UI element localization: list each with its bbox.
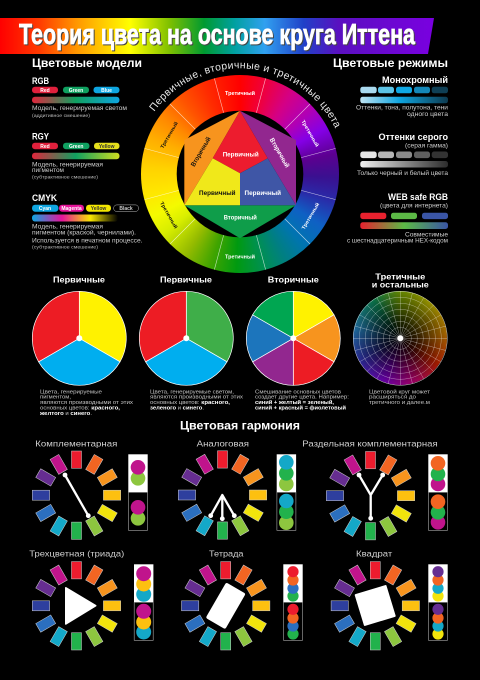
panel: tertiary wheel <box>353 272 447 406</box>
panel: colour modes <box>333 58 449 244</box>
web safe mode: с шестнадцатеричным HEX-кодом <box>347 238 448 244</box>
RGY model: Модель, генерируемая <box>32 163 103 169</box>
web safe mode <box>347 192 449 244</box>
panel: tertiary wheel: и остальные <box>372 280 429 290</box>
CMYK model <box>32 193 143 250</box>
heading: colour modes: Цветовые режимы <box>333 58 448 70</box>
panel: primary light pie: являются производными от этих <box>150 395 243 401</box>
RGB model: Модель, генерируемая светом <box>32 106 127 112</box>
RGY model: Yellow <box>99 144 115 150</box>
monochrome mode: Оттенки, тона, полутона, тени <box>356 106 448 112</box>
web safe mode: WEB safe RGB <box>388 192 448 202</box>
RGY model: Red <box>40 144 50 150</box>
panel: square harmony: Квадрат <box>356 549 392 559</box>
RGB model: (аддитивное смешение) <box>32 113 91 118</box>
wheel labels: Вторичный <box>224 213 257 221</box>
panel: secondary pie: синий + красный = фиолетовый <box>255 404 346 411</box>
RGB model: Blue <box>101 88 112 94</box>
panel: primary light pie: зеленого и синего . <box>150 405 204 411</box>
RGY model: RGY <box>32 132 49 142</box>
curved heading: Первичные, вторичные и третичные цвета <box>149 62 340 128</box>
CMYK model: Magenta <box>61 206 82 212</box>
panel: secondary pie: создает другие цвета. Например: <box>255 395 349 401</box>
panel: primary pigment pie: пигментом, <box>40 395 71 401</box>
panel: split complementary harmony <box>302 439 448 540</box>
greyscale mode: Только черный и белый цвета <box>357 170 449 177</box>
wheel labels: Первичный <box>245 189 281 197</box>
panel: primary light pie: основных цветов: красного, <box>150 400 231 406</box>
monochrome mode <box>356 75 449 118</box>
outer twelve-part ring <box>141 75 339 273</box>
web safe mode: Совместимые <box>405 233 449 239</box>
panel: complementary harmony <box>32 439 148 539</box>
RGY model: пигментом <box>32 168 64 174</box>
wheel labels: Первичный <box>199 189 236 197</box>
panel: primary pigment pie: основных цветов: красного, <box>40 405 121 411</box>
panel: tetrad harmony: Тетрада <box>209 549 244 559</box>
panel: tetrad harmony <box>182 549 303 650</box>
panel: primary pigment pie <box>32 274 133 417</box>
heading: colour models: Цветовые модели <box>32 58 142 70</box>
CMYK model: Cyan <box>39 206 51 212</box>
heading: colour harmony: Цветовая гармония <box>180 418 300 432</box>
RGB model: RGB <box>32 76 49 86</box>
inner hexagon and triangle <box>184 111 296 238</box>
RGY model: Green <box>69 144 83 150</box>
CMYK model: Модель, генерируемая <box>32 224 103 230</box>
RGB model: Green <box>69 88 83 94</box>
greyscale mode: (серая гамма) <box>405 143 448 149</box>
RGB model <box>32 76 127 118</box>
wheel labels: Вторичный <box>189 136 213 168</box>
web safe mode: (цвета для интернета) <box>380 203 448 209</box>
panel: primary light pie: Цвета, генерируемые светом, <box>150 389 234 395</box>
greyscale mode <box>357 132 449 177</box>
wheel labels: Вторичный <box>268 137 291 169</box>
CMYK model: Используется в печатном процессе. <box>32 238 143 244</box>
panel: primary pigment pie: Цвета, генерируемые <box>40 389 102 395</box>
wheel labels <box>158 90 321 260</box>
CMYK model: CMYK <box>32 193 57 203</box>
panel: primary pigment pie: желтого и синего . <box>39 411 92 417</box>
panel: tertiary wheel: Третичные <box>375 272 426 282</box>
panel: tertiary wheel: третичного и далее.м <box>369 400 430 406</box>
greyscale mode: Оттенки серого <box>378 132 448 142</box>
RGY model <box>32 132 120 180</box>
wheel labels: Третичный <box>158 200 179 230</box>
panel: split complementary harmony: Раздельная комплементарная <box>302 439 438 449</box>
CMYK model: Yellow <box>91 206 106 212</box>
CMYK model: Black <box>119 206 133 212</box>
panel: primary pigment pie: Первичные <box>53 274 105 284</box>
CMYK model: (субтрактивное смешение) <box>32 244 99 250</box>
CMYK model: пигментом (краской, чернилами). <box>32 230 136 236</box>
RGY model: (субтрактивное смешение) <box>32 175 99 180</box>
panel: square harmony <box>331 549 448 650</box>
panel: tertiary wheel: Цветовой круг может <box>369 388 431 395</box>
panel: secondary pie: Смешивание основных цветов <box>255 389 341 395</box>
panel: secondary pie: Вторичные <box>268 274 319 284</box>
panel: primary light pie: Первичные <box>160 274 212 284</box>
wheel labels: Первичный <box>223 150 259 158</box>
panel: triad harmony <box>29 549 153 650</box>
wheel labels: Третичный <box>225 90 255 97</box>
wheel labels: Третичный <box>159 120 180 150</box>
panel: primary light pie <box>139 274 243 411</box>
panel: analogous harmony <box>178 439 296 539</box>
monochrome mode: Монохромный <box>382 75 448 85</box>
panel: primary pigment pie: являются производными от этих <box>40 400 133 406</box>
panel: secondary pie: синий + желтый = зеленый, <box>255 399 335 406</box>
chart: Itten colour wheel <box>141 62 340 273</box>
monochrome mode: одного цвета <box>407 112 449 118</box>
wheel labels: Третичный <box>300 119 321 148</box>
panel: tertiary wheel: расширяться до <box>369 395 416 401</box>
wheel labels: Третичный <box>225 254 255 260</box>
RGB model: Red <box>40 88 50 94</box>
panel: complementary harmony: Комплементарная <box>35 439 118 449</box>
panel: triad harmony: Трехцветная (триада) <box>29 549 124 559</box>
panel: analogous harmony: Аналоговая <box>197 439 249 449</box>
panel: secondary pie <box>246 274 349 411</box>
panel: colour models <box>32 58 143 250</box>
wheel labels: Третичный <box>300 201 321 231</box>
